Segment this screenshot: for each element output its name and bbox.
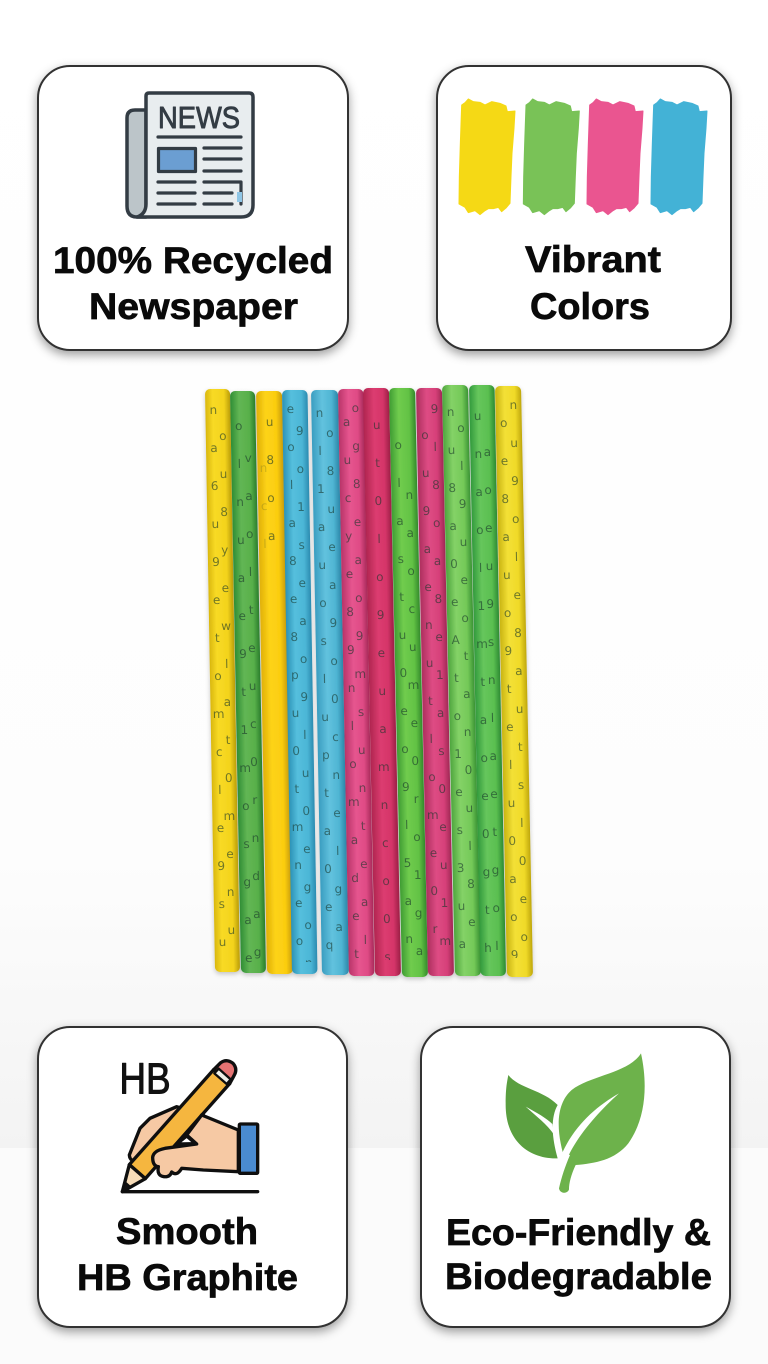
pencil 1 yellow [205,389,242,1068]
pencil 3 yellow: u 8 o a [262,415,279,548]
pencil 4 blue: e o l a 8 e 8 p u 0 t m n e o a c d [283,402,309,1067]
icon: newspaper [127,93,253,217]
pencil 1 yellow: o u 8 y e w l a t 0 m e n u s o [216,429,240,1018]
pencil 5 blue: o 8 u e a 9 o 0 c n e l g a u 1 [323,426,348,1015]
pencil 4 blue: 9 o 1 s e a o 9 l u 0 e g o n u [293,424,317,1013]
pencil 6 pink: o g 8 e a o 9 m s u n t e a l c [348,401,373,990]
label: 100% Recycled Newspaper: Newspaper [89,286,298,327]
label: Smooth HB Graphite: Smooth [116,1211,258,1252]
pencil 12 yellow [494,386,535,982]
label: Vibrant Colors: Vibrant [525,239,661,280]
pencil 1 yellow: n a 6 u 9 e t o m c l e 9 s u e o d [206,403,232,1068]
icon: hand writing with HB pencil [119,1054,258,1192]
pencil 3 yellow [255,391,293,974]
icon: hand writing with HB pencil: HB [119,1054,171,1103]
pencil 12 yellow: o e 8 a u o 9 t e l u 0 a o 9 e l d [497,416,524,1081]
pencil 3 yellow: n c l [256,461,272,556]
pencil 5 blue: n l 1 a u o s l u p t a 0 e q u o d [312,406,339,1071]
pencil 8 green: n a o c u m e 0 r o 1 g a [402,488,427,963]
label: Eco-Friendly & Biodegradable: Eco-Friendly & [446,1212,711,1253]
icon: four paint swatches [459,99,707,215]
label: 100% Recycled Newspaper: 100% Recycled [53,240,333,281]
label: Vibrant Colors: Colors [530,286,650,327]
panel: 100% recycled newspaper [38,66,348,350]
label: Eco-Friendly & Biodegradable: Biodegradable [445,1256,712,1297]
pencil 7 crimson [363,388,402,1045]
pencil 8 green: o l a s t u 0 e o 9 l 5 a n s 1 [391,438,418,1027]
pencil 6 pink [338,389,376,1042]
label: Smooth HB Graphite: HB Graphite [77,1257,298,1298]
pencil 11 green: u n a o l 1 m t a o e 0 g t h e o [470,409,497,1036]
pencil 6 pink: a u c y e 8 9 n l o m a d e t u p [339,415,365,1042]
pencil 2 green [230,391,267,1008]
pencil 12 yellow: n u 9 o l e 8 a u t s l 0 e o 1 u [506,398,533,1025]
pencil 4 blue [282,390,319,1067]
icon: green leaves [506,1053,645,1193]
photo: twelve colored newspaper pencils [203,384,535,982]
pencil 7 crimson: u t 0 l o 9 e u a m n c o 0 s o a [370,418,396,1045]
icon: newspaper: NEWS [158,100,240,135]
pencil 2 green: v a o l t e u c 0 r n d a g u [241,451,266,1002]
pencil 10 light green: n u 8 a 0 e A t o 1 e s 3 u a g 9 s [443,405,472,1070]
pencil 11 green: a o e u 9 s n l a e t g o l [480,445,504,958]
panel: eco-friendly and biodegradable [421,1027,730,1327]
label: Vibrant Colors [525,239,661,327]
panel: vibrant colors [437,66,731,350]
panel: smooth HB graphite [38,1027,347,1327]
pencil 9 pink: 9 l 8 o a 8 e 1 a s 0 e u 1 m a g [427,402,454,1029]
pencil 2 green: o l n u a e 9 t 1 m o s g a e n [232,419,257,1008]
pencil 10 light green: o l 9 u e o t a n 0 u l 8 e m c o [454,421,482,1048]
pencil 10 light green [441,384,482,980]
pencil 8 green [389,388,429,1027]
pencil 9 pink [415,388,456,980]
label: Smooth HB Graphite [77,1211,298,1298]
pencil 9 pink: o u 9 a e n u t l o m e 0 r a u n d [418,428,445,1093]
pencil 11 green [469,385,507,1036]
label: Eco-Friendly & Biodegradable [445,1212,712,1297]
label: 100% Recycled Newspaper [53,240,333,327]
pencil 5 blue [311,390,351,1071]
